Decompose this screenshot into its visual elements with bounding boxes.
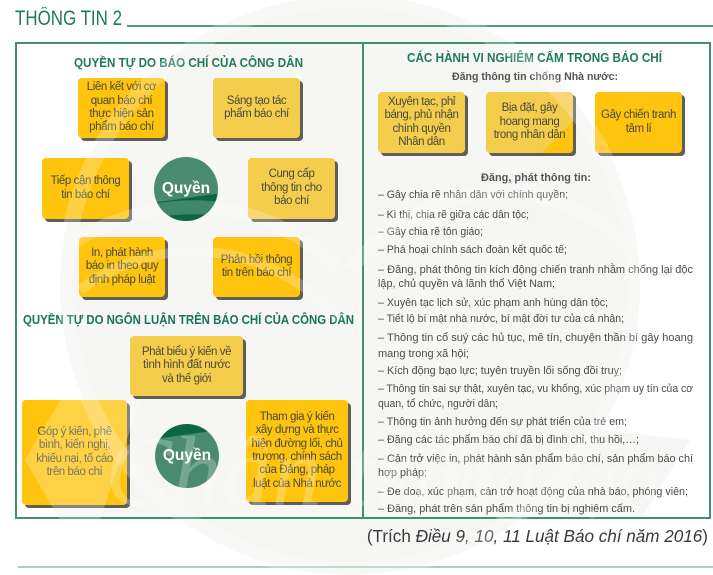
- box: distort: chính quyền: [392, 122, 451, 134]
- box: comment: khiếu nại, tố cáo: [36, 452, 113, 464]
- watermark overlay: Chân trời: [105, 416, 495, 527]
- box: distort: báng, phủ nhận: [384, 109, 459, 121]
- box: create: [213, 78, 300, 138]
- list: prohibited content: – Đe doạ, xúc phạm, cản trở hoạt động của nhà báo, phóng viên;: [378, 486, 688, 498]
- list: prohibited content: – Kì thị, chia rẽ giữa các dân tộc;: [378, 209, 529, 221]
- list: prohibited content: – Cản trở việc in, phát hành sản phẩm báo chí, sản phẩm báo chí: [378, 453, 693, 465]
- heading: prohibited acts: CÁC HÀNH VI NGHIÊM CẤM TRONG BÁO CHÍ: [407, 50, 662, 65]
- box: print: định pháp luật: [89, 274, 155, 286]
- box: provide: thông tin cho: [261, 182, 322, 194]
- panel: left: [15, 42, 364, 519]
- list: prohibited content: [378, 189, 693, 515]
- box: participate: trương, chính sách: [252, 451, 342, 463]
- list: prohibited content: – Thông tin sai sự thật, xuyên tạc, vu khống, xúc phạm uy tín của cơ: [378, 383, 693, 395]
- box: access: [42, 158, 129, 219]
- list: prohibited content: – Gây chia rẽ tôn giáo;: [378, 226, 483, 238]
- box: feedback: tin trên báo chí: [222, 267, 291, 279]
- list: prohibited content: – Thông tin ảnh hưởng đến sự phát triển của trẻ em;: [378, 416, 627, 428]
- box: participate: hiện đường lối, chủ: [251, 438, 343, 450]
- box: print: báo in theo quy: [86, 260, 158, 272]
- box: fabricate: trong nhân dân: [494, 129, 565, 141]
- box: access: tin báo chí: [61, 188, 110, 200]
- list: prohibited content: hợp pháp;: [378, 467, 427, 479]
- circle: rights bottom: [155, 424, 219, 488]
- bottom rule: [18, 566, 713, 568]
- subheading: anti-state: Đăng thông tin chống Nhà nước:: [452, 71, 618, 83]
- box: opinion: Phát biểu ý kiến về: [142, 346, 231, 358]
- box: opinion: [130, 336, 243, 396]
- heading: press freedom: QUYỀN TỰ DO BÁO CHÍ CỦA CÔNG DÂN: [74, 55, 303, 70]
- list: prohibited content: – Đăng, phát trên sản phẩm thông tin bị nghiêm cấm.: [378, 503, 635, 515]
- list: prohibited content: – Xuyên tạc lịch sử, xúc phạm anh hùng dân tộc;: [378, 297, 608, 309]
- list: prohibited content: lập, chủ quyền và lãnh thổ Việt Nam;: [378, 278, 555, 290]
- box: feedback: Phản hồi thông: [221, 254, 292, 266]
- box: provide: [248, 158, 335, 219]
- box: feedback: [213, 237, 300, 297]
- list: prohibited content: – Kích động bạo lực; tuyên truyền lối sống đồi truỵ;: [378, 365, 622, 377]
- box: connect: quan báo chí: [91, 95, 152, 107]
- box: psychological war: Gây chiến tranh: [601, 109, 676, 121]
- circle: rights top: [154, 157, 218, 221]
- list: prohibited content: – Đăng các tác phẩm báo chí đã bị đình chỉ, thu hồi,…;: [378, 434, 639, 446]
- box: connect: thực hiện sản: [89, 108, 154, 120]
- box: distort: [378, 92, 465, 153]
- box: print: [79, 237, 165, 297]
- list: prohibited content: mang trong xã hội;: [378, 348, 469, 360]
- box: fabricate: [486, 92, 573, 153]
- list: prohibited content: quan, tổ chức, người dân;: [378, 398, 498, 410]
- box: participate: [246, 400, 348, 502]
- box: distort: Xuyên tạc, phỉ: [388, 96, 455, 108]
- citation: (Trích Điều 9, 10, 11 Luật Báo chí năm 2016): [367, 527, 708, 546]
- box: comment: Góp ý kiến, phê: [37, 426, 112, 438]
- list: prohibited content: – Phá hoại chính sách đoàn kết quốc tế;: [378, 244, 567, 256]
- box: opinion: và thế giới: [162, 373, 211, 385]
- panel: right: [362, 42, 711, 519]
- box: connect: Liên kết với cơ: [87, 81, 156, 93]
- box: create: phẩm báo chí: [224, 108, 289, 120]
- box: participate: của Đảng, pháp: [259, 464, 335, 476]
- box: provide: Cung cấp: [269, 168, 314, 180]
- title rule: [127, 25, 713, 27]
- box: opinion: tình hình đất nước: [143, 359, 230, 371]
- subheading: publishing: Đăng, phát thông tin:: [481, 172, 591, 184]
- watermark overlay: sáng tạo: [385, 435, 658, 523]
- box: create: Sáng tạo tác: [227, 95, 286, 107]
- box: participate: luật của Nhà nước: [253, 478, 341, 490]
- box: participate: Tham gia ý kiến: [260, 411, 334, 423]
- list: prohibited content: – Đăng, phát thông tin kích động chiến tranh nhằm chống lại độc: [378, 263, 693, 276]
- box: distort: Nhân dân: [398, 136, 445, 148]
- box: connect: [78, 78, 165, 138]
- list: prohibited content: – Gây chia rẽ nhân dân với chính quyền;: [378, 189, 568, 201]
- circle: rights bottom: Quyền: [163, 447, 211, 464]
- box: psychological war: tâm lí: [626, 122, 651, 134]
- box: comment: [22, 400, 127, 505]
- box: access: Tiếp cận thông: [51, 175, 120, 187]
- box: provide: báo chí: [274, 195, 309, 207]
- box: participate: xây dựng và thực: [256, 424, 338, 436]
- box: comment: bình, kiến nghị,: [39, 439, 110, 451]
- box: print: In, phát hành: [91, 247, 153, 259]
- circle: rights top: Quyền: [162, 180, 210, 197]
- list: prohibited content: – Tiết lộ bí mật nhà nước, bí mật đời tư của cá nhân;: [378, 313, 624, 325]
- box: fabricate: Bịa đặt, gây: [502, 102, 557, 114]
- list: prohibited content: – Thông tin cổ suý các hủ tục, mê tín, chuyện thần bí gây hoang: [378, 332, 693, 344]
- box: fabricate: hoang mang: [500, 116, 559, 128]
- box: comment: trên báo chí: [47, 466, 102, 478]
- box: connect: phẩm báo chí: [89, 121, 154, 133]
- box: psychological war: [595, 92, 682, 153]
